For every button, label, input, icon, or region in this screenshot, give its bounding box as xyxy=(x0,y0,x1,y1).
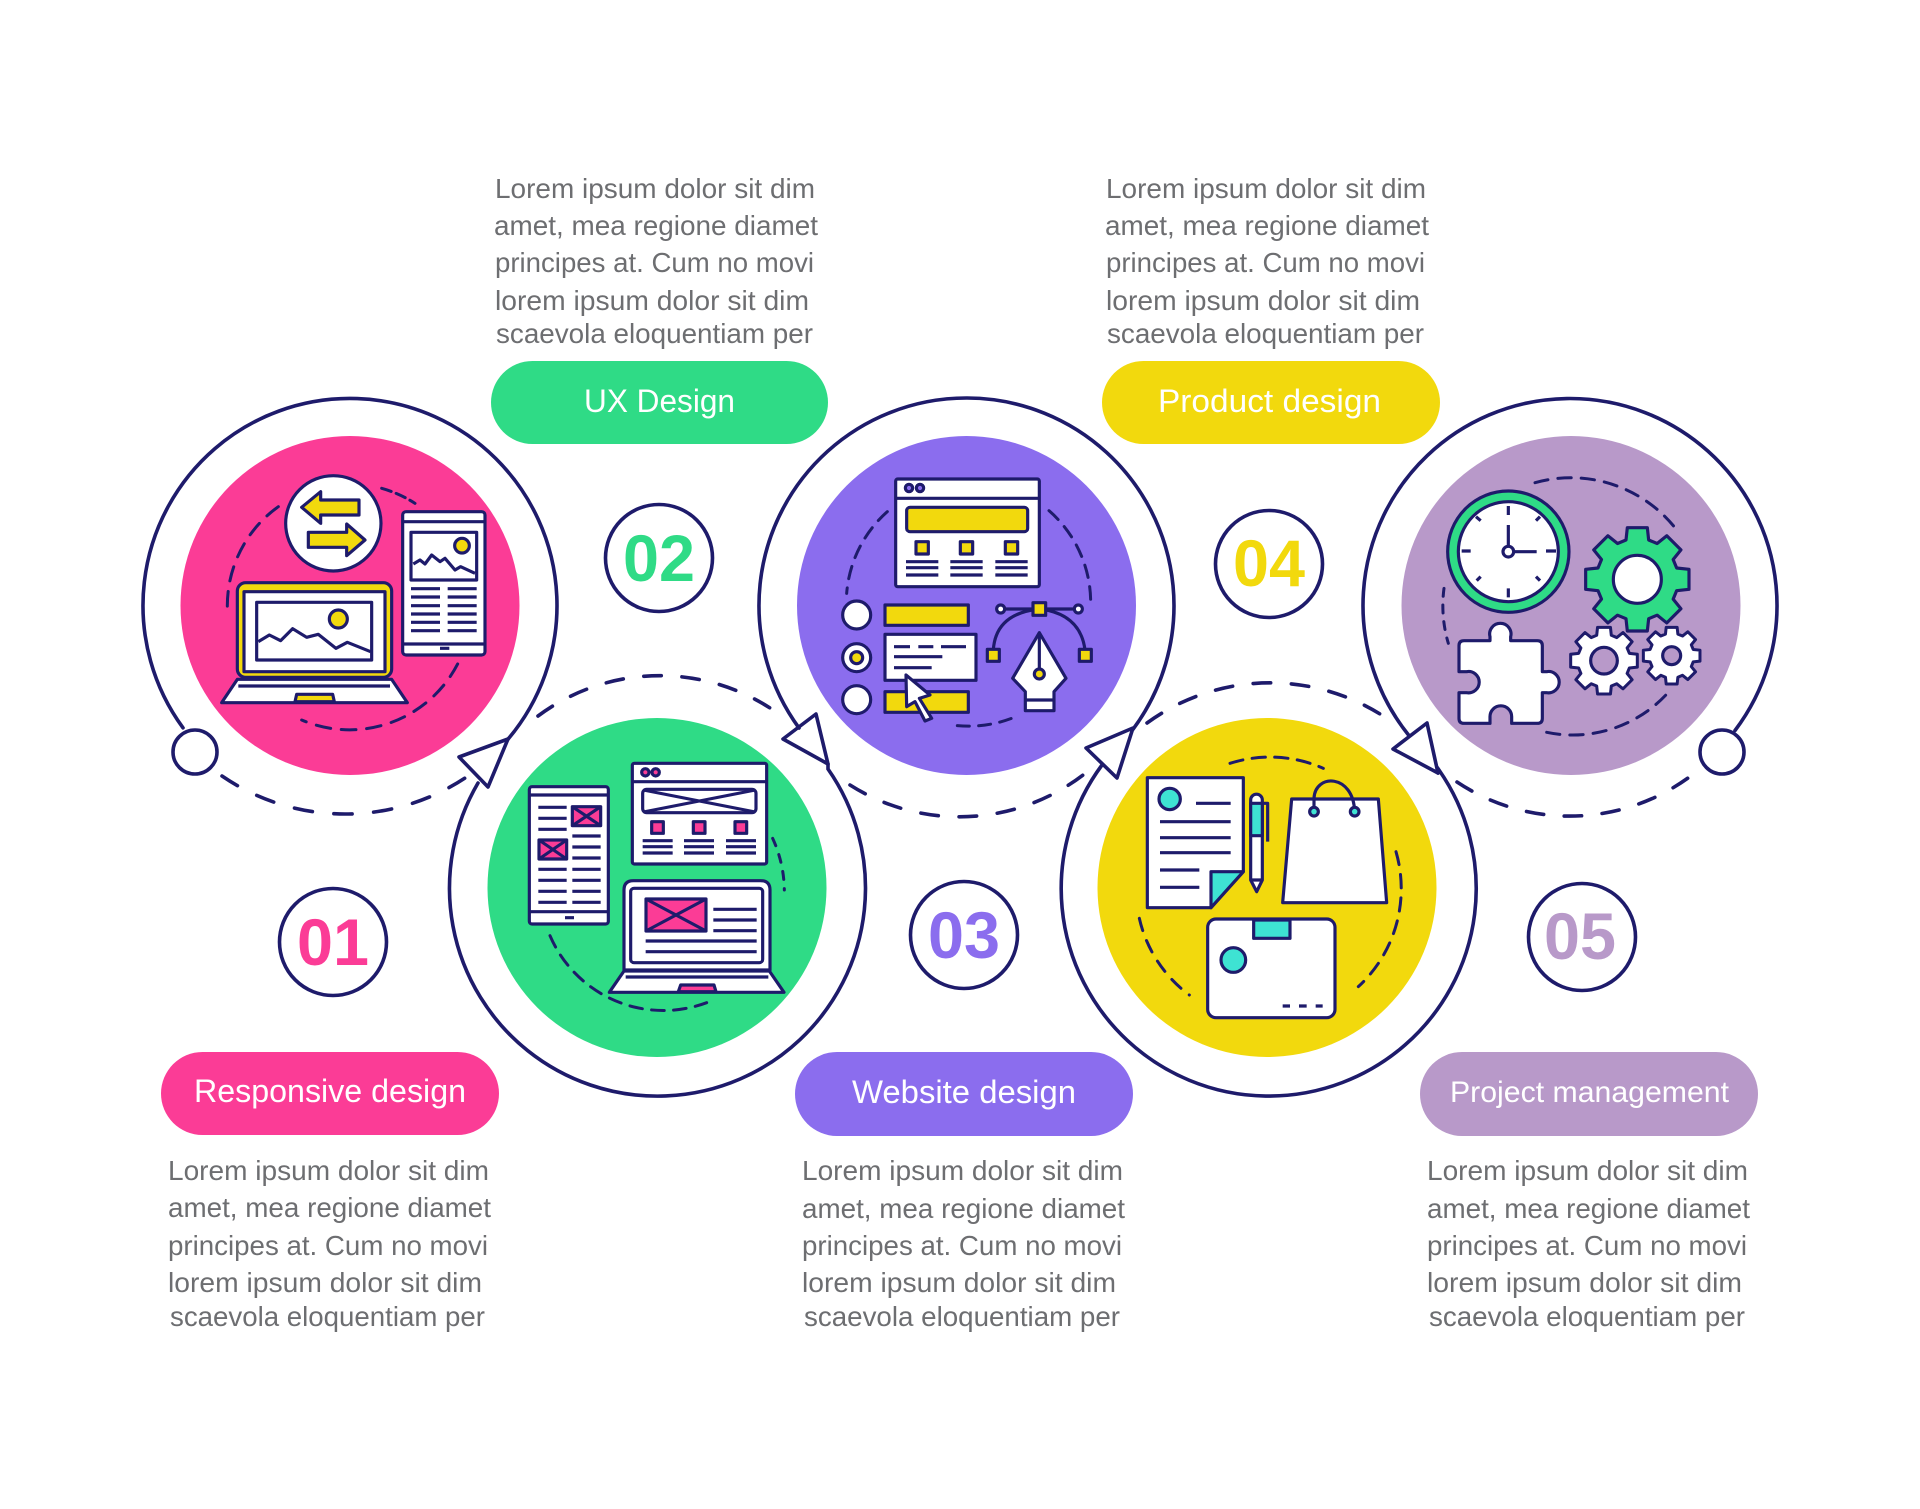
step 3 colored disc xyxy=(797,436,1136,775)
step 2 colored disc xyxy=(488,718,826,1057)
number badge 01: 01 xyxy=(297,905,369,979)
step 2 ring xyxy=(449,764,865,1096)
step 4 dashed connector xyxy=(1147,683,1380,723)
label pill: Website design: Website design xyxy=(852,1074,1076,1110)
number badge 02: 02 xyxy=(623,521,695,595)
step 5 dashed connector xyxy=(1457,778,1688,816)
number badge 04 xyxy=(1216,510,1322,618)
step 2 description: lorem ipsum dolor sit dim xyxy=(495,285,809,316)
step 1 start dot xyxy=(173,730,217,774)
step 1 dashed connector xyxy=(222,776,465,814)
label pill: Website design xyxy=(795,1052,1133,1136)
panel: step 3 website design xyxy=(759,398,1174,1332)
step 1 description xyxy=(168,1155,491,1332)
panel: step 4 product design xyxy=(1061,173,1476,1096)
panel: step 5 project management xyxy=(1363,398,1777,1332)
label pill: Project management xyxy=(1420,1052,1758,1136)
icon: product documents, bag and box xyxy=(1139,757,1401,1018)
step 4 description: principes at. Cum no movi xyxy=(1106,247,1425,278)
label pill: Responsive design: Responsive design xyxy=(194,1073,466,1109)
label pill: Project management: Project management xyxy=(1450,1076,1730,1109)
step 1 description: Lorem ipsum dolor sit dim xyxy=(168,1155,489,1186)
step 1 description: amet, mea regione diamet xyxy=(168,1192,491,1223)
step 2 description xyxy=(494,173,818,349)
step 4 colored disc xyxy=(1098,718,1436,1057)
step 5 description: lorem ipsum dolor sit dim xyxy=(1427,1267,1742,1298)
step 5 description: amet, mea regione diamet xyxy=(1427,1193,1750,1224)
icon: responsive devices xyxy=(222,476,485,730)
icon: wireframe devices xyxy=(529,763,784,1011)
step 2 description: scaevola eloquentiam per xyxy=(496,318,813,349)
step 2 description: amet, mea regione diamet xyxy=(494,210,818,241)
icon: web layout and pen tool xyxy=(843,479,1091,726)
step 5 end dot xyxy=(1700,730,1744,774)
step 2 description: principes at. Cum no movi xyxy=(495,247,814,278)
step 4 description: lorem ipsum dolor sit dim xyxy=(1106,285,1420,316)
label pill: UX Design: UX Design xyxy=(584,383,735,419)
number badge 03 xyxy=(910,882,1018,988)
step 4 ring xyxy=(1061,765,1476,1096)
step 3 description xyxy=(802,1155,1125,1332)
step 5 description: principes at. Cum no movi xyxy=(1427,1230,1747,1261)
icon: clock, gears and puzzle xyxy=(1443,478,1700,735)
step 3 ring xyxy=(759,398,1174,729)
step 2 dashed connector xyxy=(538,676,770,716)
step 1 description: scaevola eloquentiam per xyxy=(170,1301,485,1332)
arrow: step 1 to step 2 xyxy=(459,739,508,787)
step 4 description: scaevola eloquentiam per xyxy=(1107,318,1424,349)
step 5 ring xyxy=(1363,398,1777,736)
step 5 description: Lorem ipsum dolor sit dim xyxy=(1427,1155,1748,1186)
step 5 description xyxy=(1427,1155,1750,1332)
label pill: Responsive design xyxy=(161,1052,499,1135)
step 1 colored disc xyxy=(180,436,520,775)
number badge 05 xyxy=(1528,884,1636,990)
step 3 description: lorem ipsum dolor sit dim xyxy=(802,1267,1116,1298)
number badge 01 xyxy=(280,888,386,996)
label pill: Product design xyxy=(1102,361,1440,444)
step 4 description: amet, mea regione diamet xyxy=(1105,210,1429,241)
step 3 description: Lorem ipsum dolor sit dim xyxy=(802,1155,1123,1186)
step 3 dashed connector xyxy=(850,775,1083,817)
arrow: step 3 to step 4 xyxy=(1086,728,1133,778)
panel: step 1 responsive design xyxy=(143,398,557,1332)
step 3 description: scaevola eloquentiam per xyxy=(804,1301,1120,1332)
step 1 description: lorem ipsum dolor sit dim xyxy=(168,1267,482,1298)
step 5 colored disc xyxy=(1402,436,1740,775)
number badge 05: 05 xyxy=(1544,899,1616,973)
arrow: step 4 to step 5 xyxy=(1393,723,1438,773)
step 4 description: Lorem ipsum dolor sit dim xyxy=(1106,173,1426,204)
step 4 description xyxy=(1105,173,1429,349)
step 1 ring xyxy=(143,398,557,739)
number badge 03: 03 xyxy=(928,898,1000,972)
number badge 02 xyxy=(606,504,712,612)
step 2 description: Lorem ipsum dolor sit dim xyxy=(495,173,815,204)
panel: step 2 UX design xyxy=(449,173,865,1096)
label pill: UX Design xyxy=(491,361,828,444)
label pill: Product design: Product design xyxy=(1158,383,1381,419)
step 3 description: amet, mea regione diamet xyxy=(802,1193,1125,1224)
step 1 description: principes at. Cum no movi xyxy=(168,1230,488,1261)
step 5 description: scaevola eloquentiam per xyxy=(1429,1301,1745,1332)
step 3 description: principes at. Cum no movi xyxy=(802,1230,1122,1261)
number badge 04: 04 xyxy=(1233,526,1305,600)
arrow: step 2 to step 3 xyxy=(783,714,828,764)
